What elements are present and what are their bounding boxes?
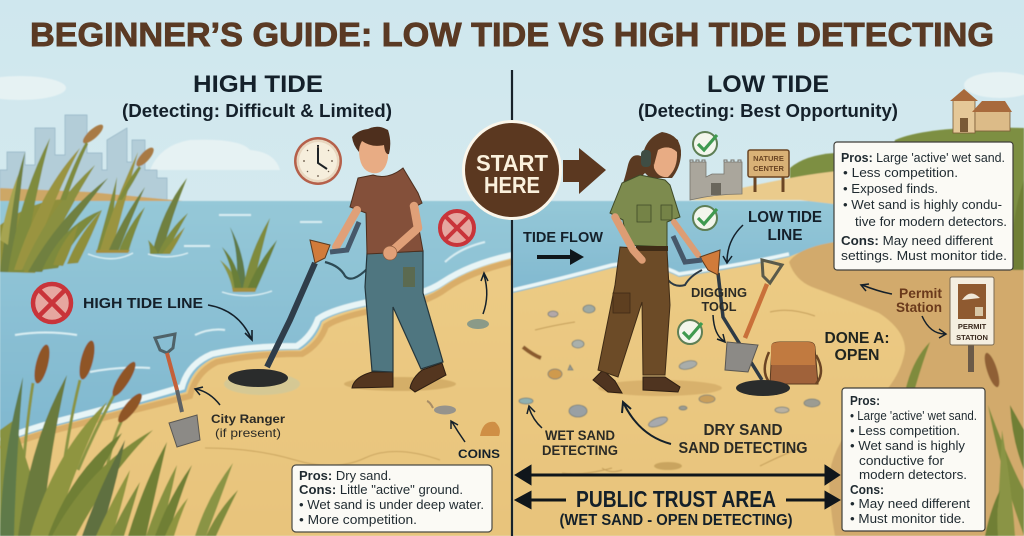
label: digging tool: DIGGING (691, 285, 747, 300)
wet sand band (0, 262, 512, 449)
distant green hill (890, 128, 1024, 250)
panel: low tide pros and cons bottom: modern detectors. (859, 467, 967, 482)
label: dry sand detecting: SAND DETECTING (678, 440, 808, 457)
label: public trust area: PUBLIC TRUST AREA (576, 486, 776, 512)
clouds (0, 72, 1024, 170)
panel: low tide pros and cons bottom: conductive for (859, 453, 945, 468)
label: city ranger: City Ranger (211, 412, 285, 426)
hair back (642, 132, 681, 178)
dark sand path (789, 240, 1024, 536)
coil halo (224, 373, 300, 395)
label: wet sand detecting: WET SAND (545, 427, 615, 443)
arrow: permit upper (861, 284, 892, 294)
label: city ranger (211, 412, 285, 440)
city skyline (0, 115, 167, 200)
sand (513, 240, 1024, 536)
trousers (598, 247, 670, 377)
panel: low tide pros and cons top: Cons: May need different (841, 233, 993, 248)
panel: low tide pros and cons bottom: • Less competition. (850, 423, 960, 438)
arrow: wet sand (527, 406, 542, 428)
arrow: city ranger (195, 387, 220, 405)
icon: satchel bag (765, 342, 821, 384)
panel: low tide pros and cons top: tive for modern detectors. (855, 214, 1007, 229)
arrow: high tide line (208, 305, 252, 340)
detector cable (325, 262, 368, 279)
panel: low tide pros and cons bottom: Pros: (850, 393, 880, 408)
far beach (690, 170, 850, 206)
label: wet sand detecting (542, 427, 618, 458)
icon: check lower (678, 320, 702, 344)
arrow: start here (563, 148, 606, 194)
heading: low tide: LOW TIDE (707, 71, 829, 98)
detector handle (330, 222, 359, 252)
detector control box (310, 240, 330, 263)
arrow: permit lower (922, 316, 946, 338)
panel: low tide pros and cons bottom: • Large 'active' wet sand. (850, 408, 977, 423)
icon: check upper (693, 132, 717, 156)
heading: high tide (122, 71, 392, 121)
arrow: low tide line (723, 225, 743, 263)
detector cable (668, 270, 702, 286)
label: permit station: Station (896, 299, 942, 315)
wave highlights (15, 215, 485, 372)
sand ripple (205, 448, 440, 466)
icon: castle (690, 160, 742, 200)
label: digging tool: TOOL (702, 299, 737, 314)
icon: prohibited near water (440, 211, 474, 245)
detector coil front (736, 380, 790, 396)
heading: low tide: (Detecting: Best Opportunity) (638, 101, 898, 121)
label: permit station (896, 285, 942, 315)
icon: coin left upper (467, 319, 489, 329)
icon: house on hill (950, 89, 1012, 133)
icon: clock (294, 137, 342, 185)
detector shaft (718, 273, 762, 380)
cattail heads (31, 339, 145, 426)
far shore strip (0, 188, 183, 204)
panel: low tide pros and cons bottom: • May need different (850, 496, 970, 511)
label: done a open: OPEN (834, 347, 880, 364)
beach pebbles and finds (519, 305, 820, 429)
sand ripples (535, 310, 815, 474)
foreground reeds and cattails (0, 375, 238, 536)
trouser stain (403, 267, 415, 287)
green hill behind sign (790, 153, 850, 185)
face (653, 147, 677, 177)
icon: prohibited at tide line (33, 284, 71, 322)
panel: high tide pros and cons: Pros: Dry sand. (299, 468, 391, 483)
label: low tide line: LINE (768, 227, 803, 244)
label: city ranger: (if present) (215, 426, 281, 440)
panel: low tide pros and cons bottom: Cons: (850, 482, 884, 497)
ponytail (622, 155, 650, 186)
shirt (350, 168, 423, 254)
shoes (593, 370, 622, 393)
sign: permit station: STATION (956, 333, 988, 342)
water (513, 201, 853, 301)
label: wet sand detecting: DETECTING (542, 442, 618, 458)
figure shadow (598, 380, 722, 396)
panel: low tide pros and cons top: • Less competition. (843, 165, 958, 180)
panel: high tide pros and cons (292, 465, 492, 532)
panel: high tide pros and cons: • Wet sand is under deep water. (299, 497, 484, 512)
detector shaft (267, 263, 315, 367)
start here badge: START (476, 150, 548, 176)
label: high tide line: HIGH TIDE LINE (83, 296, 203, 312)
arrow: dry sand (622, 402, 671, 444)
hair (352, 127, 390, 154)
arrow: tide flow (537, 249, 584, 265)
sand (0, 258, 512, 536)
left arm (336, 210, 357, 247)
icon: shovel right (725, 260, 782, 372)
icon: shovel left (155, 334, 200, 447)
tall reeds upper left (0, 138, 277, 292)
detector coil (228, 369, 288, 387)
right arm (391, 206, 418, 252)
title: BEGINNER’S GUIDE: LOW TIDE VS HIGH TIDE DETECTING (30, 16, 994, 53)
surf line (513, 254, 789, 290)
hair front (648, 136, 680, 165)
left arm (615, 217, 642, 260)
panel: low tide pros and cons top (834, 142, 1013, 270)
panel: low tide pros and cons bottom: • Must monitor tide. (850, 511, 965, 526)
icon: shell (480, 422, 500, 436)
panel: low tide pros and cons top: • Exposed finds. (843, 181, 938, 196)
panel: low tide pros and cons top: settings. Must monitor tide. (841, 248, 1007, 263)
start here badge (462, 120, 562, 220)
heading: high tide: HIGH TIDE (193, 71, 323, 98)
cargo pocket (613, 293, 630, 313)
icon: coin and crab (427, 401, 456, 414)
start here badge: HERE (484, 172, 540, 198)
headphones (641, 150, 651, 167)
sign: nature center: NATURE (753, 154, 784, 163)
cattails upper (60, 122, 156, 200)
shirt (610, 175, 680, 247)
figure: woman with metal detector (593, 132, 762, 393)
surf line (0, 255, 512, 441)
label: tide flow: TIDE FLOW (523, 229, 604, 246)
water ripples around tufts (88, 253, 272, 296)
detector handle (673, 236, 702, 262)
arrow: public trust span (517, 467, 838, 483)
trousers (365, 251, 443, 372)
label: done a open: DONE A: (824, 330, 890, 347)
shoes (352, 372, 393, 388)
fist (383, 246, 397, 260)
panel: low tide pros and cons bottom (842, 388, 985, 531)
label: wet sand open detecting: (WET SAND - OPEN DETECTING) (560, 512, 792, 529)
label: dry sand detecting: DRY SAND (704, 422, 782, 439)
center divider (511, 70, 513, 536)
figure: man with metal detector (228, 127, 446, 392)
sign: permit station: PERMIT (958, 322, 987, 331)
sign: permit station (950, 277, 994, 372)
scene: low tide beach (513, 128, 1024, 536)
panel: low tide pros and cons top: Pros: Large 'active' wet sand. (841, 150, 1005, 165)
belt (636, 246, 668, 251)
grass right edge (905, 180, 1024, 536)
label: digging tool (691, 285, 747, 314)
right arm (674, 222, 698, 255)
arrow: coins (451, 421, 465, 442)
panel: low tide pros and cons top: • Wet sand is highly condu- (843, 197, 1002, 212)
label: low tide line (748, 209, 822, 244)
label: permit station: Permit (899, 285, 942, 301)
label: coins: COINS (458, 447, 500, 461)
arrow: public trust left (517, 493, 566, 507)
sign: nature center: CENTER (753, 164, 784, 173)
label: dry sand detecting (678, 422, 808, 457)
sign: nature center (748, 150, 789, 192)
heading: high tide: (Detecting: Difficult & Limited) (122, 101, 392, 121)
figure shadow (344, 377, 456, 391)
heading: low tide (638, 71, 898, 121)
shirt pockets (637, 205, 672, 222)
arrow: public trust right (786, 493, 838, 507)
panel: low tide pros and cons bottom: • Wet sand is highly (850, 438, 966, 453)
panel: high tide pros and cons: Cons: Little "active" ground. (299, 482, 463, 497)
arrow: to upper coin (481, 273, 488, 314)
label: done a open (824, 330, 890, 364)
icon: check middle (693, 206, 717, 230)
panel: high tide pros and cons: • More competition. (299, 512, 417, 527)
label: low tide line: LOW TIDE (748, 209, 822, 226)
arrow: digging tool (713, 315, 725, 342)
stems (18, 380, 122, 536)
water (0, 201, 512, 451)
detector control box (700, 250, 720, 275)
head (359, 140, 388, 173)
